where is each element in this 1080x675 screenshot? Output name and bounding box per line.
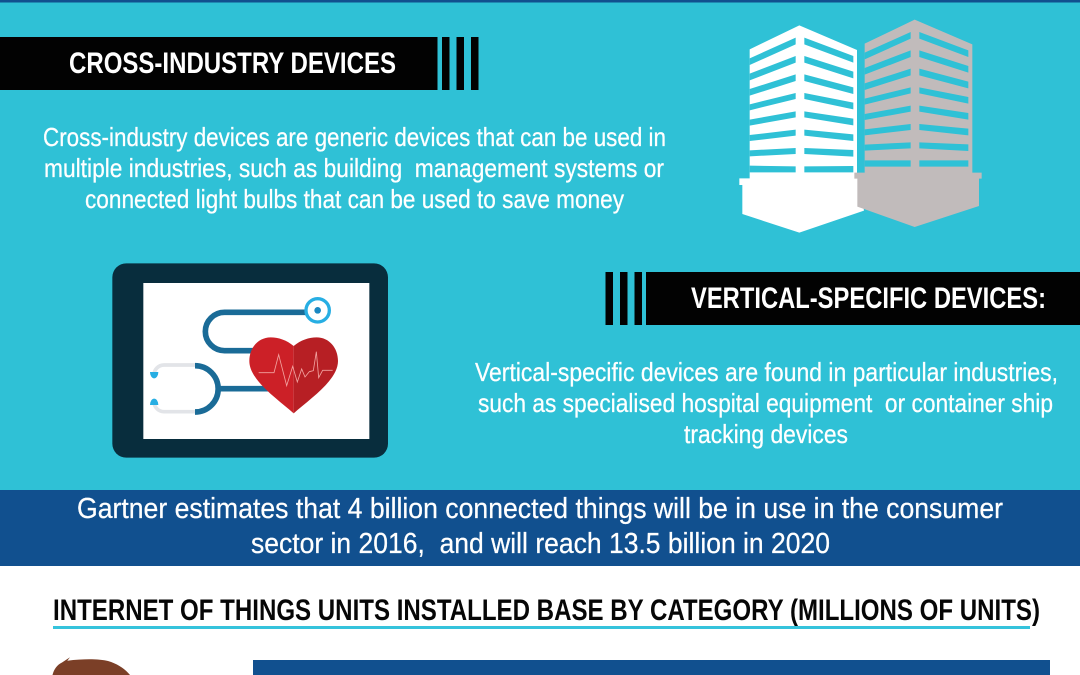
heading: cross-industry devices	[0, 37, 478, 90]
icon part: grey building	[854, 20, 982, 227]
banner: Gartner estimate: Gartner estimates that 4 billion connected things will be in use in the consumer	[77, 493, 1003, 525]
icon: person hair	[52, 657, 130, 675]
icon part: stethoscope	[150, 299, 329, 412]
banner: Gartner estimate: sector in 2016, and will reach 13.5 billion in 2020	[251, 528, 830, 560]
table header bar	[253, 660, 1050, 675]
text block: cross-industry description: connected light bulbs that can be used to save money	[85, 184, 624, 214]
text block: cross-industry description	[43, 122, 666, 214]
icon part: heart	[249, 337, 338, 413]
text block: cross-industry description: Cross-industry devices are generic devices that can be used in	[43, 122, 666, 152]
text block: vertical-specific description	[475, 357, 1058, 449]
banner: Gartner estimate	[0, 490, 1080, 566]
panel: teal devices section	[0, 0, 1080, 490]
text block: cross-industry description: multiple industries, such as building management systems or	[44, 153, 664, 183]
heading: cross-industry devices: CROSS-INDUSTRY DEVICES	[69, 47, 396, 80]
icon: office buildings	[739, 20, 982, 233]
icon part: white building	[739, 25, 864, 233]
text block: vertical-specific description: tracking devices	[684, 419, 848, 449]
icon: tablet with stethoscope and heart	[112, 263, 388, 458]
heading: vertical-specific devices	[606, 272, 1080, 325]
